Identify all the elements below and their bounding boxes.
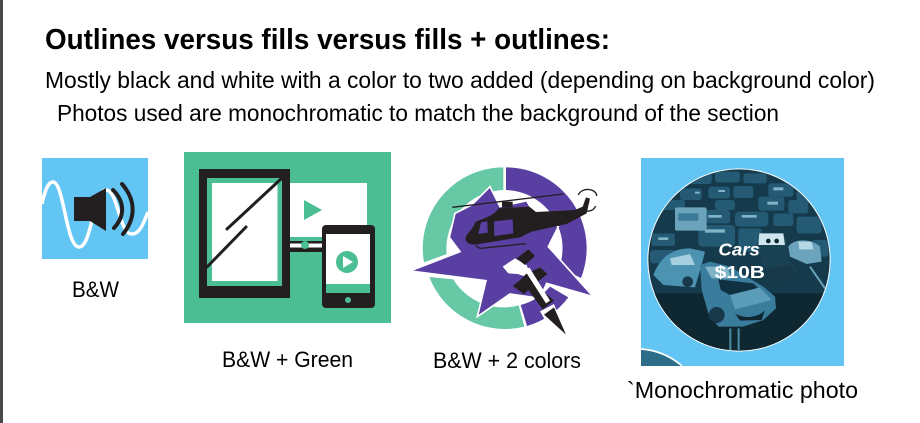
subtitle line one: Mostly black and white with a color to two added (depending on background color) — [45, 67, 875, 93]
title: Outlines versus fills versus fills + outlines: — [45, 24, 610, 56]
icon: helicopter, star and missile — [410, 167, 597, 335]
subtitle line two: Photos used are monochromatic to match the background of the section — [57, 100, 779, 126]
photo: monochromatic cars circle — [641, 158, 844, 366]
label: B&W + Green: B&W + Green — [222, 347, 353, 372]
label: Monochromatic photo: `Monochromatic photo — [627, 377, 858, 403]
label: B&W + 2 colors: B&W + 2 colors — [433, 348, 581, 373]
icon: speaker on blue panel — [42, 158, 148, 259]
label: B&W: B&W — [72, 277, 119, 302]
icon: tablet and phone on green panel — [184, 152, 391, 323]
photo: monochromatic cars circle: $10B — [715, 262, 765, 282]
photo: monochromatic cars circle: Cars — [718, 239, 760, 259]
